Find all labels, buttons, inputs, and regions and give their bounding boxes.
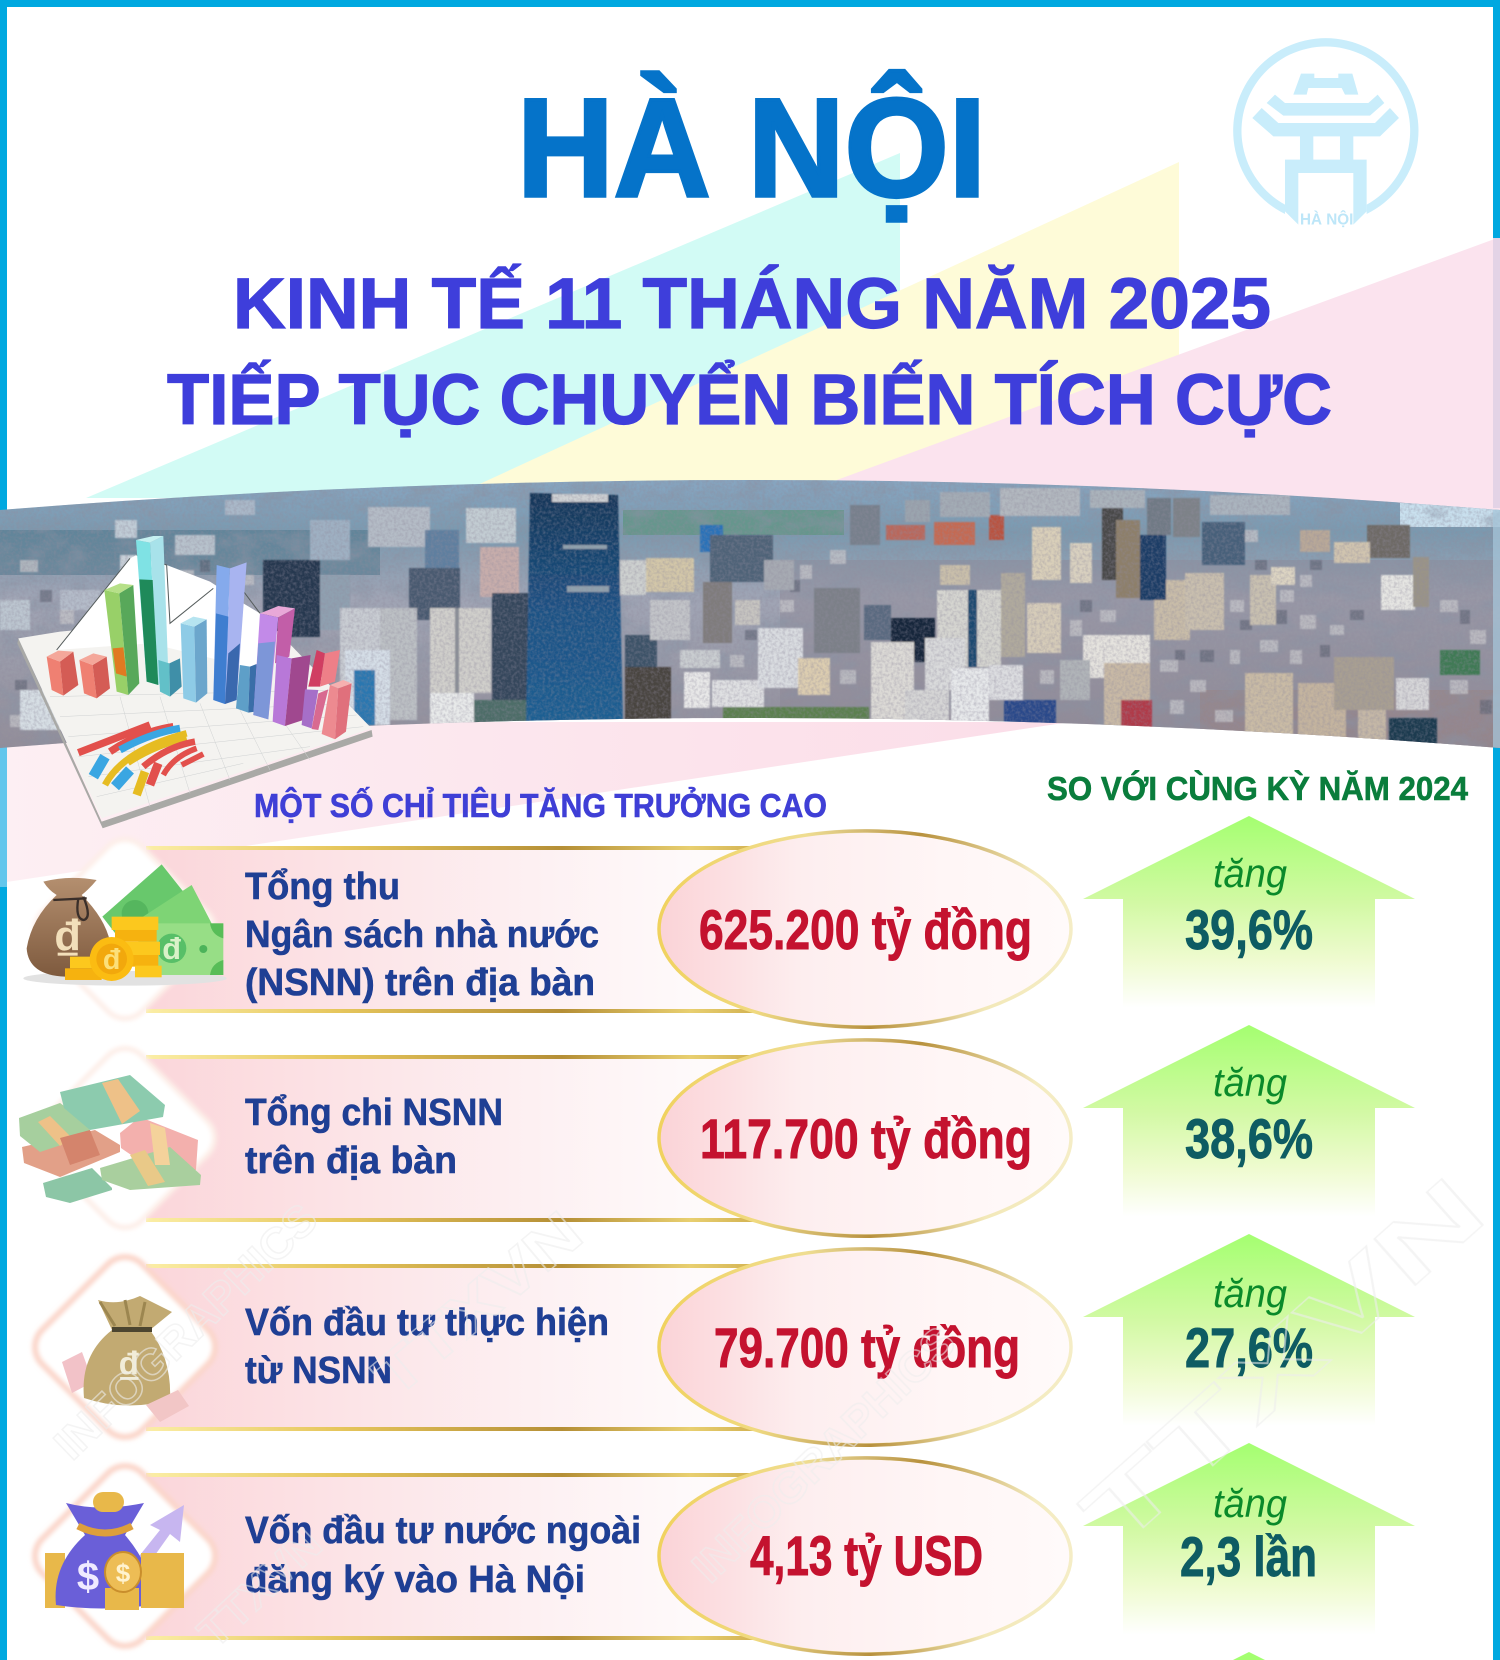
- label: Tổng thu: [245, 866, 400, 908]
- icon: money bag with notes and coins: [23, 864, 227, 986]
- icon: money bag with notes and coins: đ: [103, 944, 121, 976]
- small residential blocks: [10, 530, 1486, 727]
- watermark: TTXVN: [360, 1198, 595, 1410]
- panel: investment from state budget: [59, 1234, 1415, 1445]
- background triangles: [0, 153, 1500, 883]
- label: [245, 1510, 641, 1601]
- heading: high growth indicators: MỘT SỐ CHỈ TIÊU TĂNG TRƯỞNG CAO: [254, 786, 827, 824]
- value ellipse: [659, 1249, 1071, 1445]
- subtitle: TIẾP TỤC CHUYỂN BIẾN TÍCH CỰC: [167, 360, 1332, 440]
- label: Vốn đầu tư thực hiện: [245, 1302, 609, 1344]
- growth arrow: 39,6%: [1185, 898, 1313, 961]
- title: HÀ NỘI: [517, 69, 986, 226]
- next arrow tip (cropped): [1233, 1652, 1265, 1660]
- bars: [47, 536, 352, 739]
- label: trên địa bàn: [245, 1140, 457, 1182]
- label: [245, 1302, 609, 1392]
- label: từ NSNN: [245, 1350, 392, 1392]
- label: [245, 1092, 503, 1182]
- icon: Hanoi logo: HÀ NỘI: [1300, 211, 1353, 229]
- value ellipse: [659, 1458, 1071, 1654]
- icon: money bag with notes and coins: đ: [162, 932, 181, 966]
- growth arrow: 38,6%: [1185, 1107, 1313, 1170]
- growth arrow: tăng: [1213, 852, 1287, 896]
- panel: total budget spending: [19, 1025, 1415, 1236]
- subtitle: KINH TẾ 11 THÁNG NĂM 2025: [233, 265, 1271, 344]
- growth arrow: 27,6%: [1185, 1316, 1313, 1379]
- growth arrow: 2,3 lần: [1180, 1525, 1317, 1588]
- growth arrow: tăng: [1213, 1061, 1287, 1105]
- subtitle: [167, 265, 1332, 440]
- growth arrow: [1083, 1443, 1415, 1635]
- value ellipse: 625.200 tỷ đồng: [699, 898, 1032, 961]
- paper grid: [50, 690, 363, 807]
- icon: stacks of banknotes: [19, 1075, 201, 1203]
- growth arrow: tăng: [1213, 1272, 1287, 1316]
- icon: purple bag, coins and arrow: $: [77, 1555, 99, 1599]
- icon: money bag with notes and coins: đ: [54, 912, 81, 960]
- label: Tổng chi NSNN: [245, 1092, 503, 1134]
- label: Vốn đầu tư nước ngoài: [245, 1510, 641, 1552]
- growth arrow: [1083, 816, 1415, 1008]
- growth arrow: [1083, 1234, 1415, 1426]
- growth arrow: tăng: [1213, 1482, 1287, 1526]
- watermark: TTXVN: [188, 1519, 332, 1657]
- label: Ngân sách nhà nước: [245, 914, 599, 956]
- icon: beige money bag: [62, 1296, 189, 1422]
- panel: foreign investment: [45, 1443, 1415, 1654]
- value ellipse: 4,13 tỷ USD: [750, 1524, 983, 1587]
- value ellipse: 79.700 tỷ đồng: [714, 1316, 1020, 1379]
- growth arrow: [1083, 1025, 1415, 1217]
- watermark: [45, 1159, 1500, 1657]
- label: [245, 866, 599, 1004]
- watermark: TTXVN: [1064, 1159, 1500, 1566]
- watermark: INFOGRAPHICS: [45, 1194, 327, 1469]
- icon: Hanoi logo: [1233, 38, 1418, 229]
- heading: compared with 2024: SO VỚI CÙNG KỲ NĂM 2024: [1047, 770, 1469, 807]
- value ellipse: 117.700 tỷ đồng: [700, 1107, 1032, 1170]
- value ellipse: [659, 831, 1071, 1027]
- icon: purple bag, coins and arrow: $: [116, 1558, 131, 1588]
- panel: total budget revenue: [23, 816, 1415, 1027]
- icon: purple bag, coins and arrow: [45, 1492, 184, 1610]
- paper colour ribbons: [78, 725, 203, 795]
- label: (NSNN) trên địa bàn: [245, 962, 595, 1004]
- chart illustration: 3D bars on paper: [17, 536, 373, 828]
- value ellipse: [659, 1040, 1071, 1236]
- icon: beige money bag: ₫: [117, 1342, 141, 1394]
- label: đăng ký vào Hà Nội: [245, 1559, 585, 1601]
- watermark: INFOGRAPHICS: [683, 1317, 965, 1592]
- photo: Hanoi skyline: [0, 470, 1500, 755]
